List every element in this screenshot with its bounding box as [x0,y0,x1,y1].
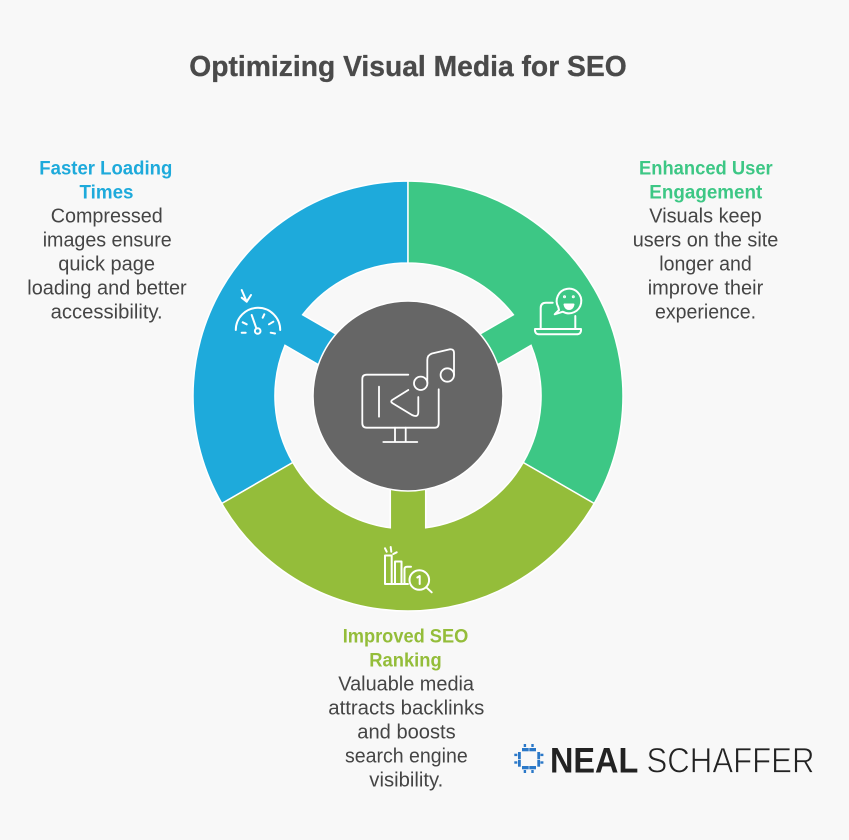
logo: neal schaffer: NEAL [550,741,638,781]
title: Optimizing Visual Media for SEO [189,51,627,83]
label: improved seo ranking: Ranking [369,650,442,672]
label: enhanced user engagement: Visuals keep [649,206,762,228]
label: faster loading times [27,158,187,324]
label: enhanced user engagement: users on the site [633,230,778,252]
icon: monitor with play and music note [362,349,454,442]
label: improved seo ranking: search engine [345,746,468,768]
label: faster loading times: Faster Loading [39,158,172,180]
label: faster loading times: loading and better [27,278,187,300]
label: enhanced user engagement: improve their [648,278,764,300]
label: enhanced user engagement: longer and [659,254,752,276]
label: enhanced user engagement [633,158,778,324]
segment: enhanced engagement (green) [408,181,623,503]
label: improved seo ranking: attracts backlinks [328,698,484,720]
label: improved seo ranking: and boosts [357,722,456,744]
label: improved seo ranking: Improved SEO [343,626,468,648]
segment: improved ranking (olive) [222,462,594,611]
segment: faster loading (blue) [193,181,408,503]
icon: laptop with smiling chat bubble [535,289,581,334]
label: enhanced user engagement: experience. [655,302,756,324]
icon: speedometer [236,290,280,334]
icon: logo chip [514,744,543,773]
logo: neal schaffer [514,741,814,781]
diagram: circular ring [193,181,623,611]
label: enhanced user engagement: Engagement [649,182,763,204]
center circle [313,301,503,491]
label: faster loading times: images ensure [43,230,172,252]
label: enhanced user engagement: Enhanced User [639,158,773,180]
label: faster loading times: Times [80,182,134,204]
label: improved seo ranking: visibility. [369,770,443,792]
label: improved seo ranking: Valuable media [338,674,475,696]
label: faster loading times: accessibility. [51,302,163,324]
label: faster loading times: quick page [58,254,155,276]
icon: ranking bars with magnifier [385,547,432,592]
label: improved seo ranking [328,626,484,792]
label: faster loading times: Compressed [51,206,163,228]
logo: neal schaffer: SCHAFFER [646,741,814,781]
